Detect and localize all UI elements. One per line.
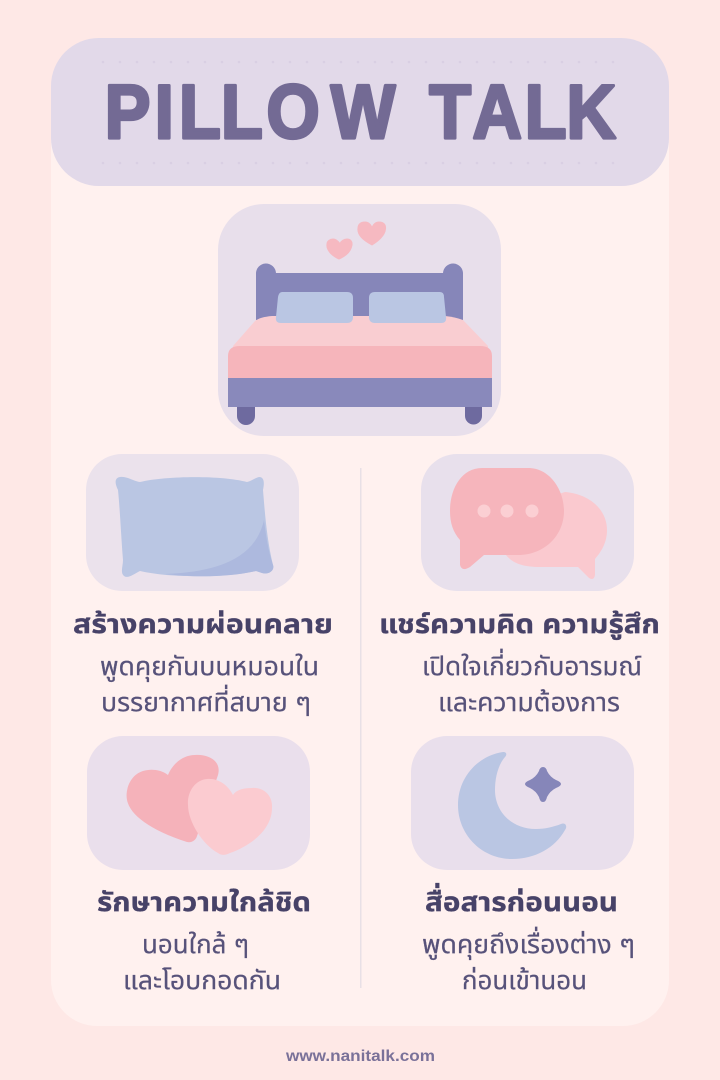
body text: นอนใกล้ ๆ — [142, 929, 249, 959]
icon: headboard — [256, 263, 463, 320]
heading: สร้างความผ่อนคลาย — [73, 609, 333, 639]
icon: small heart — [188, 779, 272, 855]
icon: left bed pillow — [276, 292, 353, 323]
panel: relax — [73, 454, 333, 717]
panel: closeness — [87, 736, 311, 995]
panel: bed illustration — [218, 204, 501, 436]
title: PILLOW TALK — [105, 71, 616, 155]
panel: share — [379, 454, 660, 717]
body text: และความต้องการ — [438, 687, 620, 717]
icon: bed base — [228, 378, 492, 407]
divider — [360, 468, 362, 988]
icon: pillow — [116, 477, 273, 577]
body text: บรรยากาศที่สบาย ๆ — [101, 684, 311, 717]
icon: large heart — [127, 755, 219, 842]
heading: สื่อสารก่อนนอน — [425, 883, 618, 917]
body text: พูดคุยถึงเรื่องต่าง ๆ — [422, 926, 635, 960]
title banner — [51, 38, 669, 186]
panel: main card — [51, 60, 669, 1026]
icon: dots — [478, 504, 538, 518]
icon: mattress top — [233, 316, 488, 350]
body text — [422, 648, 642, 717]
heading: แชร์ความคิด ความรู้สึก — [379, 609, 660, 640]
icon: front speech bubble — [450, 468, 564, 569]
icon: hearts above bed — [327, 222, 386, 259]
icon: back speech bubble — [504, 492, 607, 579]
icon: right bed pillow — [369, 292, 446, 323]
body text — [422, 926, 635, 995]
icon: blanket front — [228, 346, 492, 378]
body text: เปิดใจเกี่ยวกับอารมณ์ — [422, 648, 642, 681]
icon: star — [525, 767, 561, 802]
body text — [100, 651, 319, 717]
body text — [123, 929, 281, 995]
icon: crescent moon — [458, 752, 566, 859]
body text: พูดคุยกันบนหมอนใน — [100, 651, 319, 682]
body text: และโอบกอดกัน — [123, 965, 281, 995]
panel: bedtime talk — [411, 736, 635, 995]
footer url: www.nanitalk.com — [285, 1048, 435, 1065]
icon: bed legs — [237, 407, 482, 425]
heading: รักษาความใกล้ชิด — [97, 887, 311, 917]
body text: ก่อนเข้านอน — [462, 965, 587, 995]
